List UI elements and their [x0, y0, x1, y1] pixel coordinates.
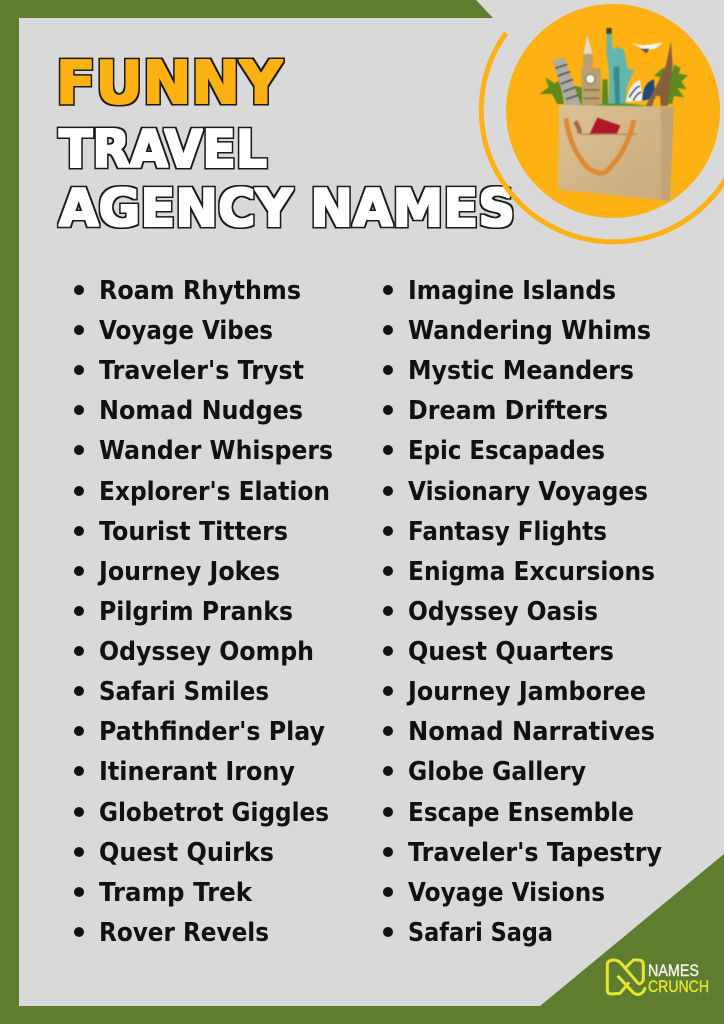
icon: airplane [631, 43, 663, 53]
left column list: Safari Smiles [99, 677, 269, 707]
right column list: Epic Escapades [408, 436, 605, 466]
logo: Names Crunch [607, 960, 709, 996]
right column list: Mystic Meanders [408, 356, 634, 386]
left column list: Odyssey Oomph [99, 637, 314, 667]
title line: AGENCY NAMES: AGENCY NAMES [59, 179, 515, 239]
left column list: Rover Revels [99, 918, 269, 948]
icon: Eiffel tower [645, 42, 673, 107]
decorative open ring around the illustration [481, 33, 724, 242]
icon: tote bag [558, 105, 674, 201]
right column list: Visionary Voyages [408, 477, 648, 507]
left column list: Journey Jokes [97, 557, 280, 587]
left column list [74, 276, 333, 948]
title [56, 48, 515, 239]
list bullets [74, 285, 84, 937]
icon: Sydney opera house [626, 79, 655, 102]
right column list: Odyssey Oasis [408, 597, 598, 627]
logo text: NAMES: NAMES [648, 961, 699, 980]
bag pocket [580, 132, 637, 136]
right column list: Traveler's Tapestry [408, 838, 662, 868]
grass [578, 103, 650, 112]
right column list: Safari Saga [408, 918, 553, 948]
illustration: travel bag on orange circle [506, 4, 720, 218]
bag handles [566, 118, 634, 173]
right column list: Imagine Islands [408, 276, 616, 306]
icon: Statue of Liberty [606, 28, 634, 109]
left column list: Tramp Trek [99, 878, 253, 908]
title line: TRAVEL: TRAVEL [59, 120, 267, 180]
icon: N mark [607, 960, 645, 994]
left column list: Tourist Titters [99, 517, 288, 547]
left column list: Pathfinder's Play [99, 717, 325, 747]
left column list: Voyage Vibes [99, 316, 273, 346]
right column list: Nomad Narratives [408, 717, 655, 747]
right column list [383, 276, 662, 948]
right column list: Enigma Excursions [408, 557, 655, 587]
bag body [558, 105, 674, 201]
left column list: Wander Whispers [99, 436, 333, 466]
left column list: Itinerant Irony [99, 757, 295, 787]
right column list: Dream Drifters [408, 396, 608, 426]
right column list: Escape Ensemble [408, 798, 634, 828]
right column list: Journey Jamboree [406, 677, 646, 707]
passport [589, 117, 621, 135]
left column list: Quest Quirks [99, 838, 274, 868]
right column list: Wandering Whims [408, 316, 651, 346]
orange circle [506, 4, 720, 218]
right column list: Quest Quarters [408, 637, 614, 667]
left column list: Traveler's Tryst [99, 356, 304, 386]
icon: palm trees [539, 65, 688, 109]
right column list: Fantasy Flights [408, 517, 607, 547]
left column list: Pilgrim Pranks [99, 597, 293, 627]
left column list: Globetrot Giggles [99, 798, 329, 828]
icon: leaning tower of Pisa [553, 57, 582, 109]
right column list: Globe Gallery [408, 757, 586, 787]
left column list: Explorer's Elation [99, 477, 330, 507]
left column list: Nomad Nudges [99, 396, 303, 426]
logo text: CRUNCH: CRUNCH [648, 977, 709, 996]
list bullets [383, 285, 393, 937]
left column list: Roam Rhythms [99, 276, 301, 306]
icon: Big Ben [581, 35, 601, 109]
title line: FUNNY: FUNNY [56, 48, 283, 117]
right column list: Voyage Visions [408, 878, 605, 908]
